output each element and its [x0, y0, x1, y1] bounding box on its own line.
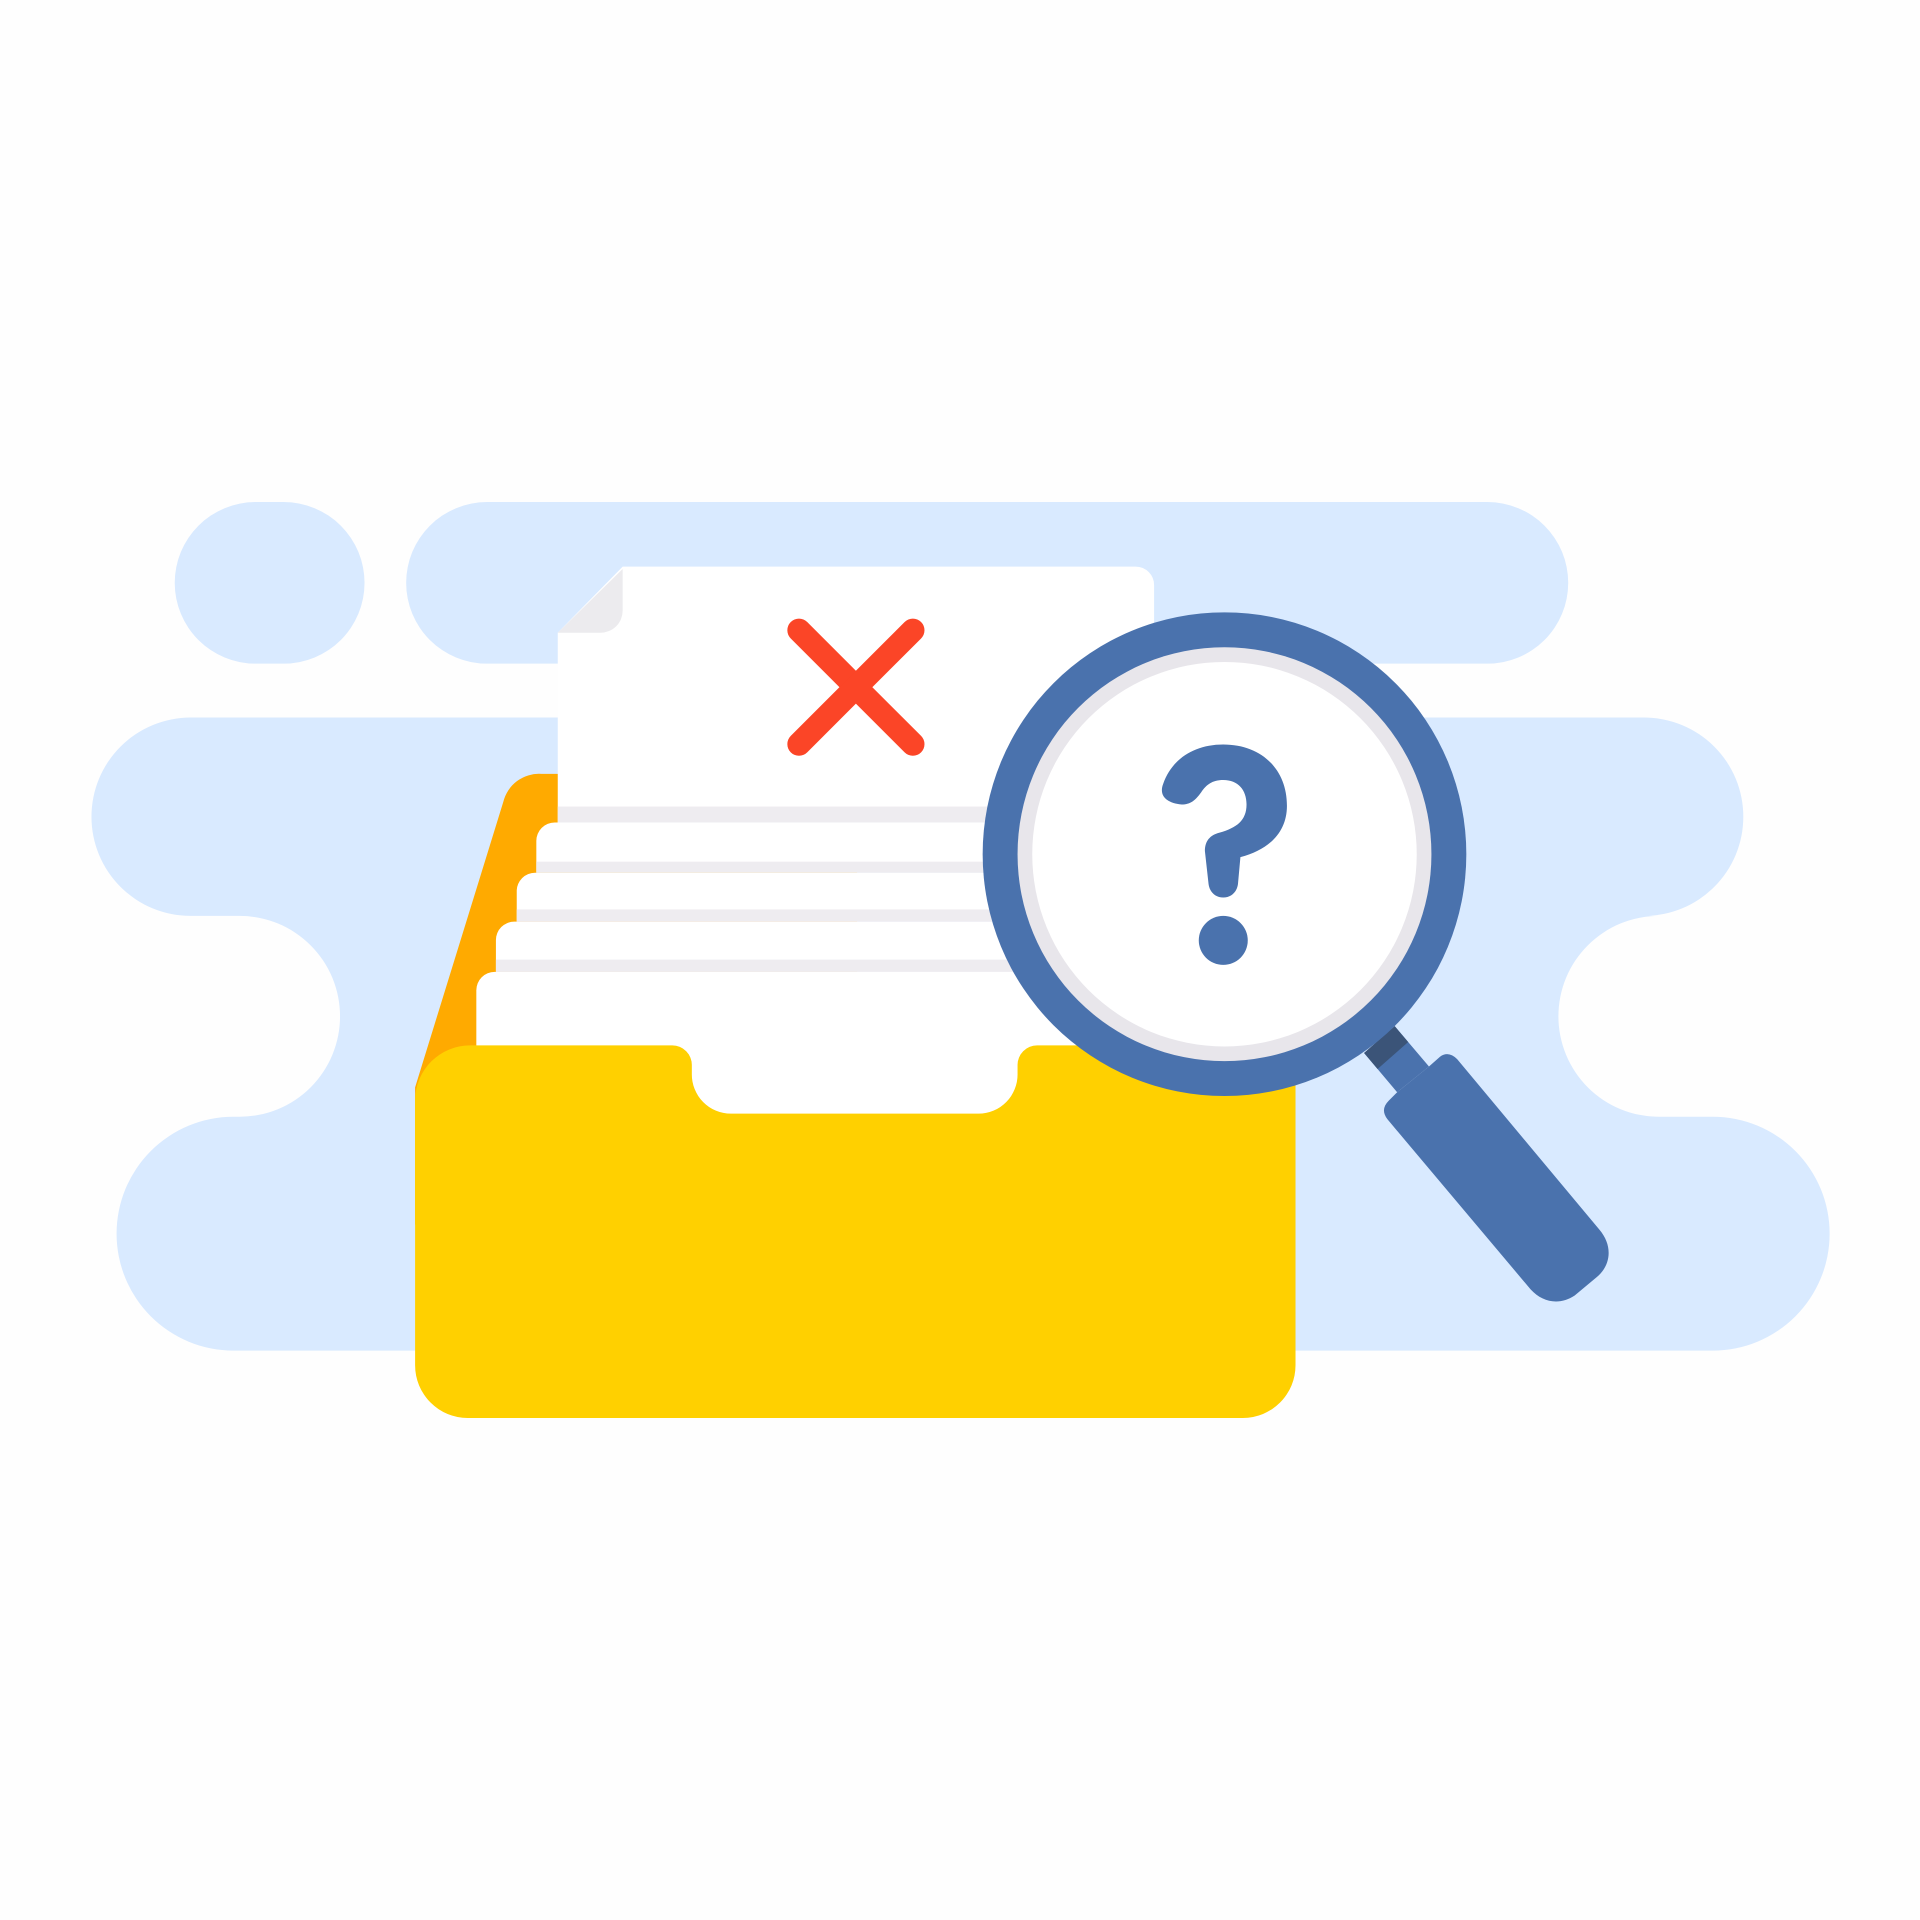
small pill: [175, 502, 365, 664]
lens glass: [1032, 662, 1417, 1046]
handle neck: [1364, 1026, 1429, 1092]
document shadow band: [558, 807, 1154, 822]
folded corner: [558, 569, 623, 633]
sheet 3 shadow band: [517, 909, 1224, 922]
sheet 4: [496, 922, 1224, 972]
handle grip: [1384, 1054, 1609, 1301]
main blob: [91, 718, 1830, 1351]
icon: red cross: [799, 630, 913, 744]
wide pill: [406, 502, 1568, 664]
background: pale blue cloud shapes: [91, 502, 1830, 1351]
folder back panel: [415, 774, 857, 1224]
sheet 2: [536, 822, 1224, 873]
handle neck dark band: [1364, 1026, 1408, 1069]
stacked paper sheets: [476, 822, 1224, 1225]
sheet 5: [476, 972, 1224, 1225]
sheet 4 shadow band: [496, 960, 1224, 972]
folder front: [415, 1045, 1296, 1418]
lens inner ring: [1018, 647, 1431, 1061]
sheet 2 shadow band: [536, 862, 1224, 873]
lens frame: [983, 612, 1466, 1096]
front document: [558, 567, 1154, 822]
icon: question mark: [1162, 744, 1287, 965]
sheet 3: [517, 873, 1224, 922]
document page: [558, 567, 1154, 822]
magnifying glass: [983, 612, 1609, 1301]
